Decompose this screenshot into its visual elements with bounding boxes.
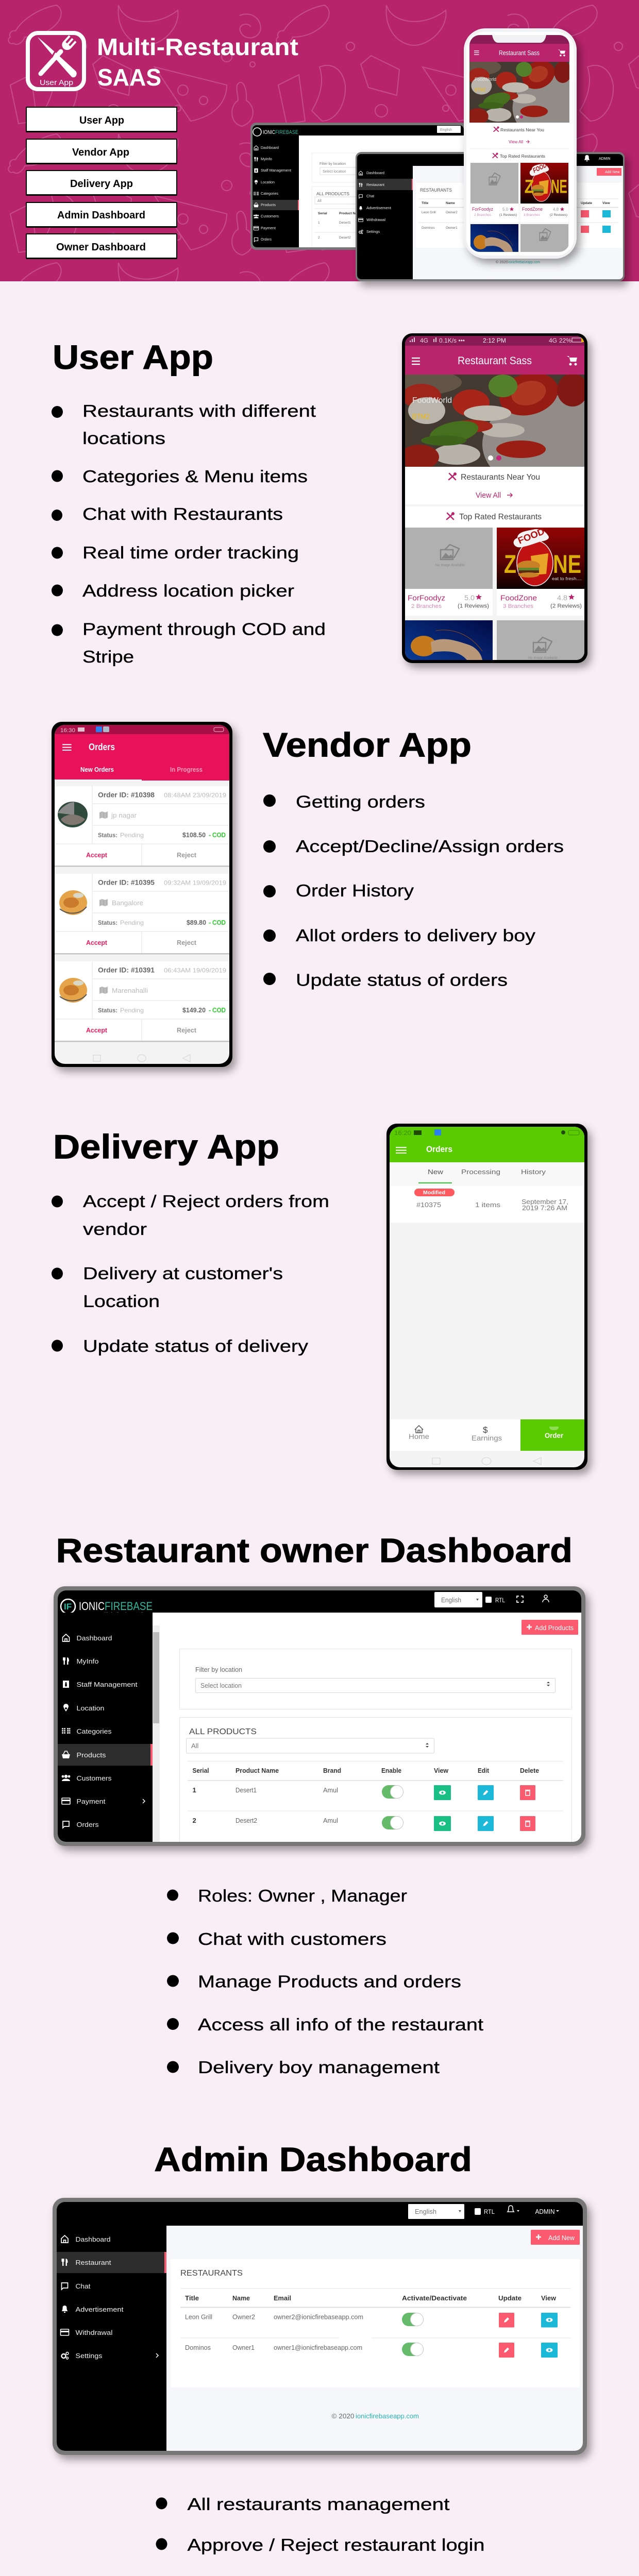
android nav bar (93, 1055, 190, 1062)
feature list: User App: locations (82, 429, 165, 448)
card: jellyfish photo (405, 620, 493, 660)
products table card: 1 (193, 1786, 196, 1794)
order card 10398: - (209, 831, 211, 839)
card: FoodZone (497, 526, 584, 616)
card: no image: No Image Available (528, 656, 558, 660)
order card 10395: - (209, 919, 211, 926)
footer credit: © 2020 (332, 2412, 355, 2420)
order card 10398: 08:48AM 23/09/2019 (164, 791, 226, 799)
restaurants table card: Activate/Deactivate (402, 2294, 467, 2302)
top bar: IONIC (79, 1600, 105, 1613)
card: FoodZone: 4.8 (557, 594, 567, 602)
products table card: Edit (478, 1767, 490, 1774)
hero mockup: owner dashboard: Select location (323, 170, 346, 174)
app bar: In Progress (170, 766, 203, 773)
products table card: Product Name (236, 1767, 279, 1774)
app bar: 16:20 (394, 1129, 411, 1137)
hero mockup: admin dashboard: Advertisement (366, 207, 391, 210)
section: Admin Dashboard (53, 2140, 587, 2576)
heading: Vendor App: Vendor App (263, 725, 472, 764)
hero mockup: user phone: Restaurant Sass (499, 49, 540, 57)
hero mockup: admin dashboard: View (602, 201, 611, 205)
feature list: User App: Categories & Menu items (82, 467, 308, 486)
hero mockup: user phone: 4.8 (553, 207, 559, 212)
app bar (405, 346, 584, 375)
card: FoodZone: FOOD (516, 526, 546, 546)
top bar: We Are Born Javascript Experts (105, 1612, 153, 1615)
phone mockup: delivery app (386, 1124, 587, 1470)
hero mockup: admin dashboard: © 2020 (496, 260, 508, 264)
feature list: User App: Payment through COD and (82, 619, 326, 639)
products table card: Amul (323, 1817, 338, 1824)
top bar: RTL (484, 2208, 495, 2215)
order card 10391: Status: (98, 1007, 117, 1014)
sidebar: Dashboard (76, 1634, 112, 1642)
heading: Restaurant owner Dashboard: Restaurant owner Dashboard (56, 1531, 573, 1569)
button: Admin Dashboard (26, 202, 177, 228)
products table card: Desert1 (236, 1786, 257, 1794)
add new button: Add New (548, 2234, 575, 2242)
top bar: English (441, 1596, 461, 1604)
hero mockup: owner dashboard: Location (261, 181, 275, 184)
app bar: Orders (426, 1144, 452, 1154)
sidebar: Categories (76, 1727, 112, 1735)
filter card: Filter by location (195, 1666, 242, 1673)
order card 10391: COD (212, 1006, 226, 1014)
sidebar: Withdrawal (75, 2329, 113, 2336)
order card 10391: Pending (120, 1007, 144, 1014)
order card 10391 (55, 961, 229, 1042)
feature list: Vendor App: Order History (296, 881, 414, 900)
order card 10398: Pending (120, 832, 144, 839)
hero mockup: owner dashboard: 1 (318, 221, 320, 225)
hero mockup: admin dashboard: Leon Grill (422, 211, 436, 214)
restaurants table card: Name (232, 2294, 250, 2302)
filter card (179, 1649, 572, 1709)
hero mockup: admin dashboard: Withdrawal (366, 218, 385, 222)
tab bar: Processing (461, 1168, 500, 1176)
feature list: admin dashboard: Approve / Reject restaurant login (188, 2535, 484, 2554)
hero mockup: user phone: FOOD (532, 161, 548, 175)
add new button (531, 2230, 580, 2245)
phone mockup: user app (400, 333, 597, 673)
button: User App: User App (79, 115, 124, 126)
hero mockup: admin dashboard: Dashboard (366, 172, 384, 175)
filter card: Select location (200, 1682, 242, 1689)
feature list: User App: Stripe (82, 647, 134, 666)
feature list: Delivery App: Update status of delivery (83, 1336, 309, 1355)
sidebar: Products (76, 1751, 106, 1759)
hero mockup: user phone: BTM2 (475, 88, 486, 92)
banner photo: BTM2 (412, 412, 430, 420)
sidebar: Customers (76, 1774, 112, 1782)
hero banner (0, 0, 639, 281)
feature list: owner dashboard: Chat with customers (198, 1929, 386, 1948)
feature list: owner dashboard: Access all info of the restaurant (198, 2015, 483, 2034)
bottom navigation: Order (545, 1431, 564, 1439)
order row (390, 1186, 584, 1223)
hero mockup: user phone: ForFoodyz (472, 207, 493, 212)
feature list: User App: Restaurants with different (82, 401, 316, 420)
sidebar: MyInfo (76, 1657, 99, 1665)
card: ForFoodyz: (1 Reviews) (458, 603, 489, 609)
status bar: 22% (559, 337, 571, 344)
feature list: Vendor App: Allot orders to delivery boy (296, 926, 536, 945)
app bar (390, 1127, 584, 1162)
feature list: User App (52, 401, 326, 666)
products table card: Serial (193, 1767, 209, 1774)
feature list: User App: Chat with Restaurants (82, 504, 283, 523)
card: FoodZone: (2 Reviews) (550, 603, 582, 609)
add products button (522, 1620, 578, 1635)
button: Vendor App (26, 139, 177, 164)
hero mockup: admin dashboard: Settings (366, 230, 380, 234)
button: Delivery App: Delivery App (70, 178, 133, 190)
order card 10391: Reject (177, 1026, 197, 1034)
hero mockup: admin dashboard: Update (581, 201, 592, 205)
hero mockup: user phone: Z (525, 176, 534, 197)
hero mockup: user phone: 3 Branches (524, 213, 541, 217)
hero mockup: owner dashboard: IONIC (263, 129, 275, 135)
top bar: ADMIN (535, 2208, 554, 2215)
status bar: 16:30 (60, 727, 75, 734)
heading: Admin Dashboard: Admin Dashboard (154, 2140, 472, 2178)
restaurants table card: owner2@ionicfirebaseapp.com (274, 2313, 363, 2320)
dashboard mockup: admin (53, 2198, 587, 2455)
feature list: Delivery App: Location (83, 1292, 160, 1311)
navigation buttons (26, 107, 177, 259)
status bar (55, 725, 229, 734)
restaurants table card: Email (274, 2294, 291, 2302)
card: FoodZone: FoodZone (500, 594, 537, 603)
section: top rated restaurants: Top Rated Restaurants (459, 513, 542, 521)
restaurants table card: RESTAURANTS (180, 2269, 243, 2278)
section: restaurants near you (405, 467, 584, 504)
hero mockup: admin dashboard: Chat (366, 195, 374, 198)
feature list: owner dashboard: Manage Products and orders (198, 1972, 461, 1991)
card: FoodZone: eat to fresh.... (552, 577, 582, 581)
order card 10395: Pending (120, 919, 144, 926)
hero mockup: admin dashboard: Owner2 (446, 211, 458, 214)
feature list: User App: Address location picker (82, 581, 294, 600)
logo: fork and knife app icon (28, 33, 84, 89)
hero mockup: admin dashboard: RESTAURANTS (420, 188, 452, 193)
order card 10398 (55, 786, 229, 867)
hero mockup: owner dashboard: 2 (318, 236, 320, 240)
feature list: admin dashboard (156, 2495, 495, 2576)
hero mockup: admin dashboard (356, 152, 625, 281)
app bar: New Orders (80, 766, 114, 773)
card: ForFoodyz (405, 528, 493, 616)
top bar: IF (64, 1602, 72, 1612)
order row: 1 items (475, 1201, 501, 1209)
hero mockup: owner dashboard: Dashboard (261, 146, 279, 150)
tab bar: History (521, 1168, 546, 1176)
products table card: Enable (381, 1767, 401, 1774)
button: Admin Dashboard: Admin Dashboard (57, 210, 145, 221)
card: ForFoodyz: ForFoodyz (408, 594, 445, 603)
section: restaurants near you: Restaurants Near You (461, 473, 540, 482)
hero mockup: user phone: Restaurants Near You (500, 127, 544, 132)
hero mockup: admin dashboard: Restaurant (366, 183, 384, 187)
android nav bar (432, 1458, 541, 1465)
order card 10395: Status: (98, 919, 117, 926)
footer credit: ionicfirebaseapp.com (356, 2412, 419, 2420)
title (97, 33, 298, 91)
status bar: 2:12 PM (483, 337, 506, 344)
hero mockup: user phone: View All (509, 139, 523, 144)
hero mockup: admin dashboard: Name (446, 201, 455, 205)
status bar: 4G (549, 337, 557, 344)
button: User App (26, 107, 177, 132)
hero mockup: owner dashboard: Orders (261, 238, 272, 242)
button: Delivery App (26, 170, 177, 196)
order card 10395: COD (212, 919, 226, 926)
order card 10391: Order ID: #10391 (98, 965, 155, 974)
order row: September 17, (522, 1198, 568, 1206)
title: Multi-Restaurant (97, 33, 298, 60)
button: Owner Dashboard (26, 233, 177, 259)
products table card: ALL PRODUCTS (189, 1727, 257, 1736)
order card 10395: 09:32AM 19/09/2019 (164, 879, 226, 886)
feature list: Vendor App (263, 792, 564, 989)
hero mockup: owner dashboard: Desert1 (339, 221, 351, 225)
hero mockup: user phone: 2 Branches (474, 213, 492, 217)
feature list: admin dashboard: All restaurants management (188, 2495, 449, 2514)
hero mockup: owner dashboard: Staff Management (261, 169, 291, 173)
hero mockup: owner dashboard: Payment (261, 227, 276, 230)
section: Delivery App (52, 1124, 587, 1470)
card: FoodZone: NE (553, 550, 581, 579)
status bar (405, 336, 584, 346)
feature list: Delivery App: Accept / Reject orders from (83, 1192, 329, 1211)
dashboard mockup: owner (54, 1586, 585, 1852)
sidebar (58, 1613, 160, 1842)
sidebar: Orders (76, 1821, 99, 1828)
sidebar: Chat (75, 2282, 91, 2290)
tab bar: New (428, 1168, 444, 1176)
feature list: Delivery App: Delivery at customer's (83, 1264, 283, 1283)
hero mockup: owner dashboard: Product Name (339, 212, 362, 215)
order card 10398: Order ID: #10398 (98, 790, 155, 799)
bottom navigation: Home (409, 1432, 429, 1440)
restaurants table card: Leon Grill (185, 2313, 212, 2320)
products table card (179, 1718, 572, 1852)
status bar: 0.1K/s ••• (439, 337, 465, 344)
order card 10395: Order ID: #10395 (98, 878, 155, 886)
section: restaurants near you: View All (476, 491, 501, 500)
hero mockup: owner dashboard: Customers (261, 215, 279, 218)
top bar (58, 1590, 581, 1615)
phone mockup: vendor app (52, 722, 232, 1067)
hero mockup: admin dashboard: Dominos (422, 226, 435, 230)
restaurants table card: View (541, 2294, 557, 2302)
order card 10398: jp nagar (111, 811, 137, 819)
heading: User App: User App (53, 338, 213, 376)
feature list: owner dashboard: Delivery boy management (198, 2058, 440, 2077)
feature list: owner dashboard (167, 1886, 483, 2077)
hero mockup: admin dashboard: Owner1 (446, 226, 458, 230)
sidebar: Location (76, 1704, 104, 1712)
products table card: Brand (323, 1767, 341, 1774)
hero mockup: owner dashboard (250, 123, 469, 253)
card: ForFoodyz: 2 Branches (411, 603, 442, 609)
feature list: Delivery App (52, 1192, 329, 1355)
order card 10398: Reject (177, 851, 197, 859)
hero mockup: admin dashboard: Title (422, 201, 429, 205)
sidebar (57, 2202, 166, 2451)
top bar: RTL (495, 1597, 505, 1604)
restaurants table card: Update (498, 2294, 522, 2302)
add products button: Add Products (535, 1624, 574, 1632)
order card 10395: Reject (177, 939, 197, 946)
restaurants table card: owner1@ionicfirebaseapp.com (274, 2344, 362, 2351)
hero mockup: owner dashboard: Products (261, 204, 276, 207)
status bar: 4G (420, 337, 428, 344)
card: ForFoodyz: 5.0 (464, 594, 475, 602)
section: User App (52, 333, 621, 666)
order row: Modified (423, 1190, 445, 1196)
order card 10398: COD (212, 831, 226, 839)
feature list: Vendor App: Getting orders (296, 792, 425, 811)
sidebar: Settings (75, 2352, 103, 2360)
order card 10398: Accept (86, 851, 108, 859)
products table card: All (191, 1742, 199, 1750)
title: SAAS (97, 64, 161, 91)
products table card: View (434, 1767, 449, 1774)
order card 10395: Bangalore (112, 899, 143, 907)
hero mockup: user phone: FoodZone (522, 207, 543, 212)
banner photo: FoodWorld (412, 396, 452, 405)
order card 10391: $149.20 (182, 1006, 206, 1014)
order row: #10375 (416, 1201, 441, 1209)
restaurants table card: Owner1 (232, 2344, 255, 2351)
restaurants table card (171, 2259, 580, 2387)
hero mockup: user phone: (1 Reviews) (499, 213, 517, 217)
restaurants table card: Dominos (185, 2344, 211, 2351)
hero mockup: admin dashboard: ionicfirebaseapp.com (509, 261, 540, 264)
hero mockup: user phone: 5.0 (502, 207, 509, 212)
hero mockup: user phone: (2 Reviews) (550, 213, 567, 217)
sidebar: Dashboard (75, 2235, 110, 2243)
hero mockup: owner dashboard: MyInfo (261, 158, 272, 161)
section: Vendor App (52, 722, 564, 1067)
hero mockup: admin dashboard: ADMIN (599, 157, 611, 161)
hero mockup: user phone: NE (551, 176, 567, 197)
tab bar (418, 1170, 546, 1183)
hero mockup: user phone: FoodWorld (475, 77, 496, 82)
app bar: Restaurant Sass (458, 355, 532, 367)
order card 10395: Accept (86, 939, 108, 946)
card: FoodZone: Z (504, 550, 516, 579)
order card 10398: Status: (98, 832, 117, 839)
feature list: Vendor App: Accept/Decline/Assign orders (296, 837, 564, 856)
button: Vendor App: Vendor App (72, 147, 129, 158)
top bar (57, 2202, 583, 2226)
bottom navigation (390, 1419, 584, 1451)
order card 10398: $108.50 (182, 831, 206, 839)
hero mockup: owner dashboard: English (440, 128, 452, 132)
hero mockup: owner dashboard: Desert2 (339, 236, 351, 240)
section: Restaurant owner Dashboard (54, 1531, 585, 2077)
feature list: User App: Real time order tracking (82, 543, 299, 562)
card: FoodZone: 3 Branches (503, 603, 534, 609)
products table card: 2 (193, 1817, 196, 1824)
feature list: Delivery App: vendor (83, 1219, 147, 1239)
hero mockup: owner dashboard: Filter by location (320, 162, 346, 166)
order card 10391: - (209, 1006, 211, 1014)
products table card: Desert2 (236, 1817, 257, 1824)
sidebar: Staff Management (76, 1681, 138, 1688)
feature list: Vendor App: Update status of orders (296, 971, 508, 989)
app bar: Orders (89, 742, 115, 752)
feature list: owner dashboard: Roles: Owner , Manager (198, 1886, 407, 1905)
products table card: Delete (520, 1767, 539, 1774)
order card 10395: $89.80 (187, 919, 206, 926)
hero mockup: owner dashboard: Categories (261, 192, 278, 196)
order card 10391: 06:43AM 19/09/2019 (164, 967, 226, 974)
order card 10391: Marenahalli (112, 987, 148, 994)
sidebar: Restaurant (75, 2259, 111, 2266)
sidebar: Advertisement (75, 2306, 124, 2313)
hero mockup: owner dashboard: All (317, 199, 322, 203)
banner photo (405, 375, 584, 467)
app bar (55, 734, 229, 781)
bottom navigation: Earnings (472, 1434, 502, 1442)
card: ForFoodyz: No Image Available (435, 564, 465, 567)
order row: 2019 7:26 AM (522, 1204, 567, 1212)
restaurants table card: Owner2 (232, 2313, 255, 2320)
heading: Delivery App: Delivery App (53, 1127, 279, 1165)
order card 10395 (55, 874, 229, 954)
sidebar: Payment (76, 1798, 106, 1805)
order card 10391: Accept (86, 1026, 108, 1034)
section: top rated restaurants (405, 506, 584, 528)
hero mockup: owner dashboard: FIREBASE (275, 129, 298, 135)
restaurants table card: Title (185, 2294, 199, 2302)
bottom navigation: $ (483, 1425, 488, 1435)
hero mockup: owner dashboard: ALL PRODUCTS (316, 192, 349, 196)
top bar: FIREBASE (105, 1600, 153, 1613)
products table card: Amul (323, 1786, 338, 1794)
hero mockup: admin dashboard: Add New (605, 171, 620, 174)
logo: fork and knife app icon: User App (40, 78, 73, 87)
button: Owner Dashboard: Owner Dashboard (56, 242, 146, 253)
hero mockup: user phone (449, 28, 590, 259)
hero mockup: user phone: Top Rated Restaurants (500, 154, 545, 159)
card: no image (497, 620, 584, 660)
top bar: English (415, 2208, 436, 2215)
hero mockup: owner dashboard: Serial (318, 212, 327, 215)
